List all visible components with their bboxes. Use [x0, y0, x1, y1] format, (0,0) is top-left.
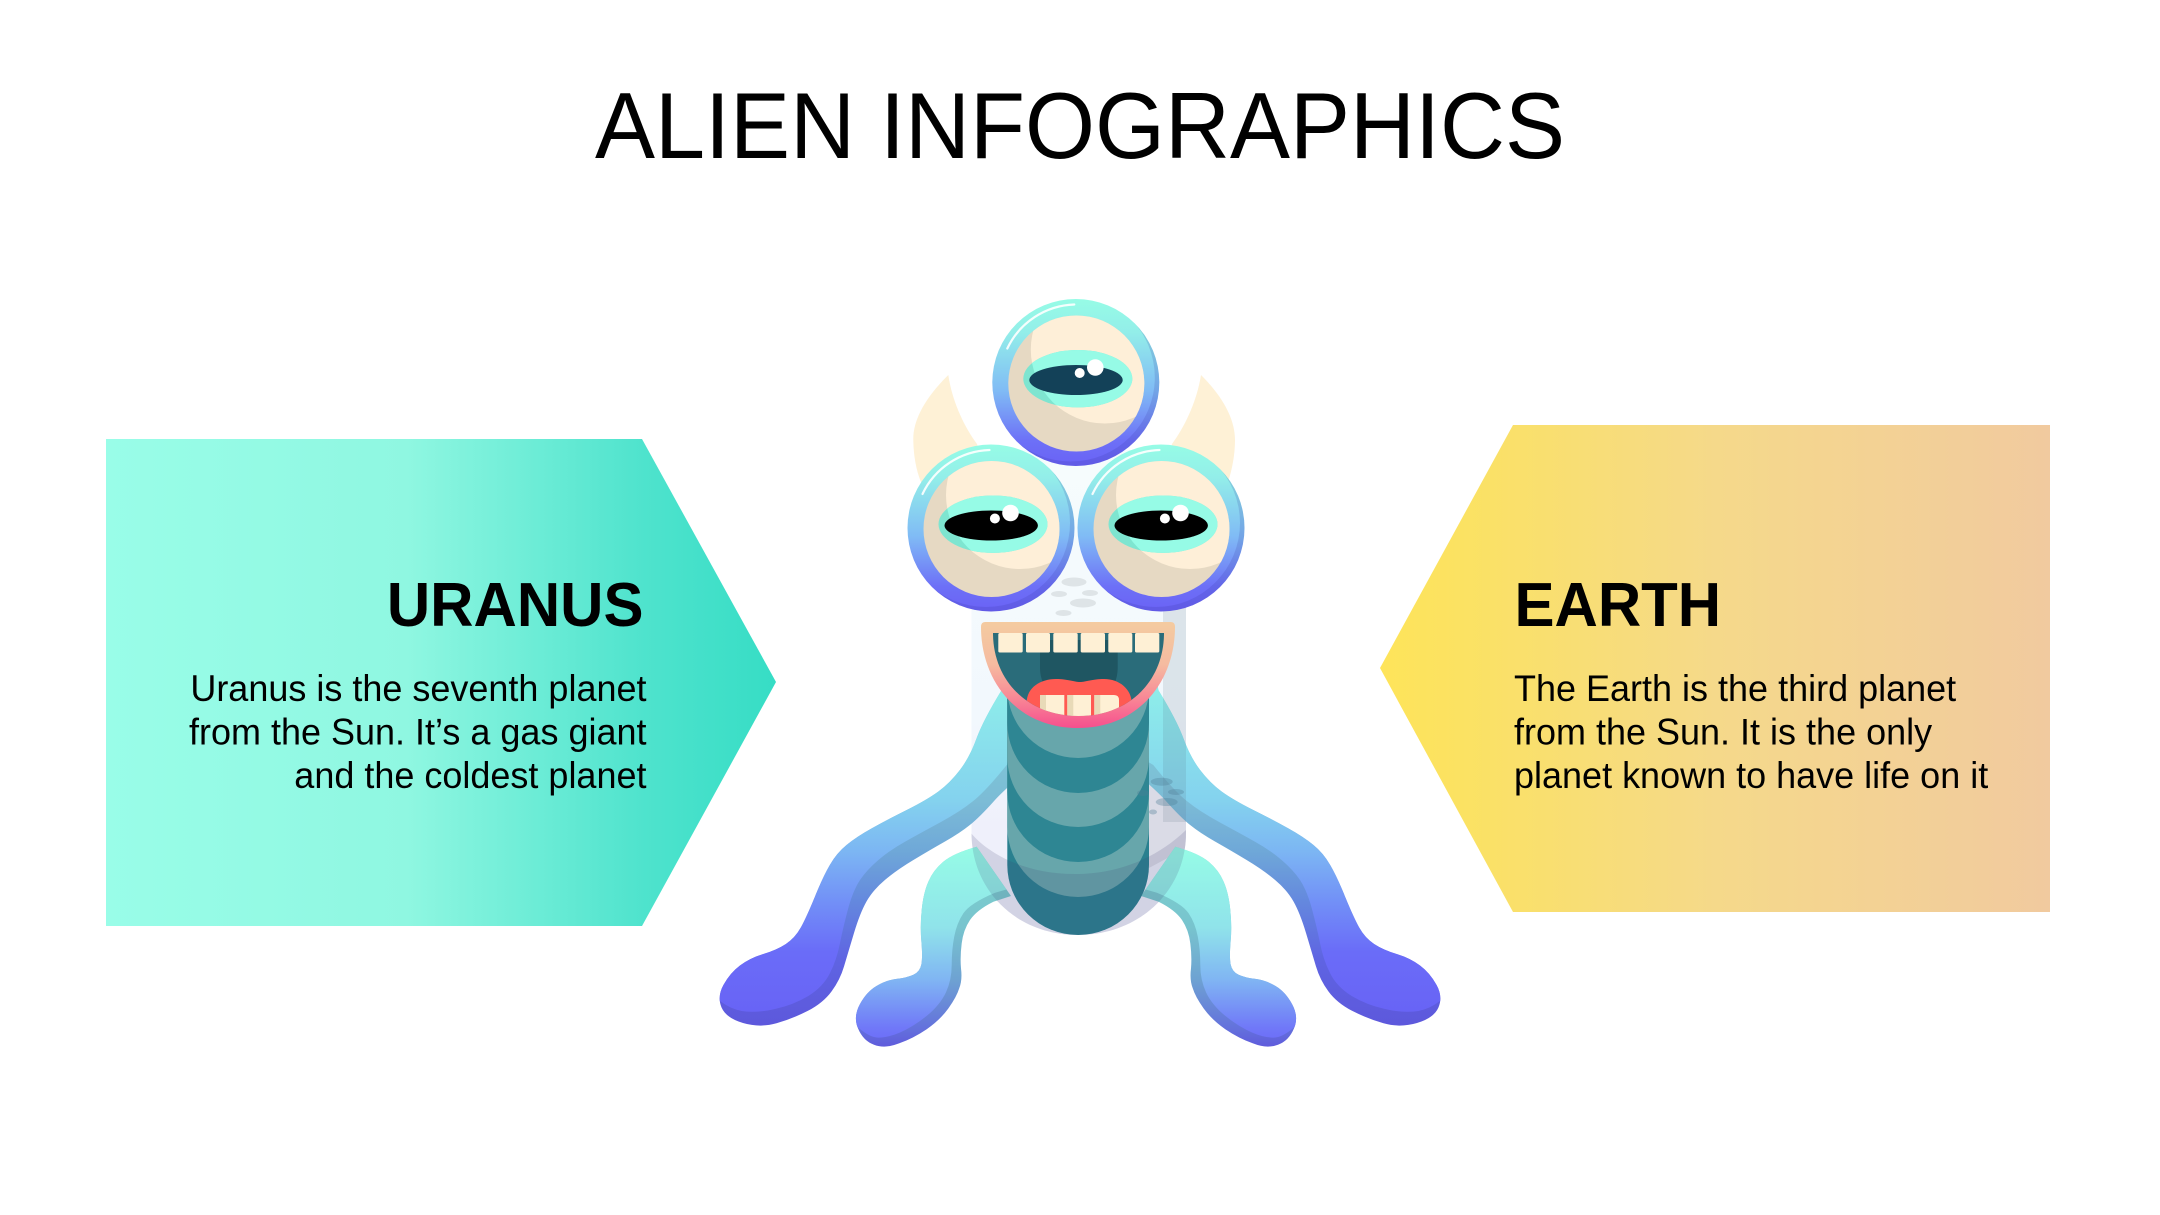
title: ALIEN INFOGRAPHICS: [595, 74, 1565, 178]
text block: uranus description: [189, 667, 646, 796]
leg: outer left: [720, 691, 1008, 1026]
tongue: [1026, 679, 1132, 716]
freckles: [1051, 578, 1098, 616]
body: lower shadow: [971, 830, 1186, 940]
body: right side strip: [1163, 590, 1186, 822]
panel: earth: [1380, 425, 2050, 912]
eye: lower right: [1078, 444, 1244, 612]
text block: earth description: from the Sun. It is the only: [1514, 711, 1933, 753]
illustration: alien: [700, 276, 1460, 1055]
horns: [913, 375, 1235, 482]
panel shape: uranus arrow: [106, 439, 776, 926]
text block: uranus description: Uranus is the seventh planet: [190, 667, 646, 709]
eye: top: [992, 299, 1160, 466]
leg: inner right: [1142, 846, 1296, 1047]
text block: uranus description: from the Sun. It’s a gas giant: [189, 711, 646, 753]
leg: outer right: [1149, 686, 1440, 1026]
mouth: [981, 622, 1175, 730]
heading: earth: EARTH: [1514, 570, 1721, 639]
heading: uranus: URANUS: [387, 570, 644, 639]
lower teeth: [1040, 695, 1119, 716]
text block: earth description: planet known to have life on it: [1514, 754, 1988, 796]
text block: uranus description: and the coldest planet: [294, 754, 646, 796]
panel: uranus: [106, 439, 776, 926]
panel shape: earth arrow: [1380, 425, 2050, 912]
neck: striped: [1007, 680, 1149, 935]
mouth interior: [993, 633, 1164, 716]
text block: earth description: [1514, 667, 1988, 796]
body: translucent tube: [970, 450, 1190, 940]
leg: inner left: [856, 846, 1011, 1047]
upper teeth: [998, 633, 1159, 652]
shadow spots on right leg: [1137, 778, 1184, 814]
lip: [981, 622, 1175, 728]
eye: lower left: [908, 444, 1074, 612]
text block: earth description: The Earth is the third planet: [1514, 667, 1956, 709]
